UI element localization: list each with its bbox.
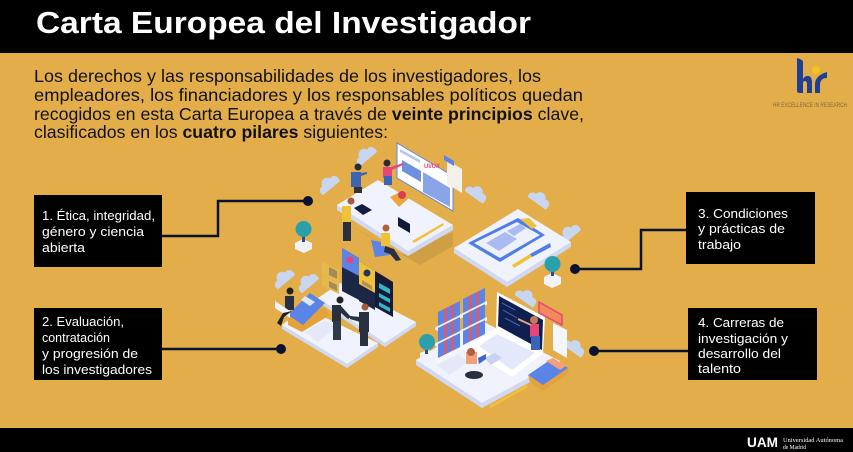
pillar 3 box: trabajo [698,238,741,252]
laptop [465,292,545,377]
intro text: empleadores, los financiadores y los responsables políticos quedan [34,85,583,105]
pillar 3 box: 3. Condiciones [698,207,788,221]
illustration: contract handshake [275,248,416,368]
pillar 1 box: género y ciencia [42,225,144,239]
intro text: clasificados en los cuatro pilares siguientes: [34,122,388,142]
pillar 3 box [686,192,815,264]
illustration: research table with team [337,143,462,265]
connector dots [276,196,599,356]
pillar 4 box: investigación y [698,332,789,346]
whiteboard: UI/UX [424,164,440,170]
pillar 4 box: desarrollo del [698,347,781,361]
logo: Universidad Autónoma de Madrid: Universidad Autónoma [783,437,843,444]
logo: Universidad Autónoma de Madrid: UAM [747,434,778,450]
pillar 3 box: y prácticas de [698,222,785,236]
header band [0,0,853,53]
pillar 1 box: abierta [42,241,85,255]
illustration: laptop library [416,288,569,408]
pillar 2 box: contratación [42,331,110,345]
illustration: clipboard [454,209,571,287]
pillar 2 box: los investigadores [42,363,152,377]
profile screens [342,248,393,317]
logo: HR Excellence in Research [773,58,847,109]
intro text: Los derechos y las responsabilidades de los investigadores, los [34,66,541,86]
logo: Universidad Autónoma de Madrid: de Madrid [783,444,807,451]
intro text: recogidos en esta Carta Europea a través de veinte principios clave, [34,104,584,124]
icon: potted tree right [544,256,561,288]
title: Carta Europea del Investigador [36,5,531,40]
pillar 4 box [688,308,817,380]
clouds [270,142,588,358]
pillar 2 box: 2. Evaluación, [42,315,124,329]
logo: Universidad Autónoma de Madrid [747,434,843,451]
pillar 1 box: 1. Ética, integridad, [42,208,155,223]
footer band [0,428,853,452]
pillar 2 box [34,308,162,380]
pillar 4 box: talento [698,362,741,376]
connector lines [162,201,688,351]
pillar 2 box: y progresión de [42,347,138,361]
intro text [34,66,584,142]
pillar 4 box: 4. Carreras de [698,316,784,330]
pillar 1 box [34,195,162,267]
icon: potted tree left [295,221,312,253]
bookshelves [435,288,487,363]
